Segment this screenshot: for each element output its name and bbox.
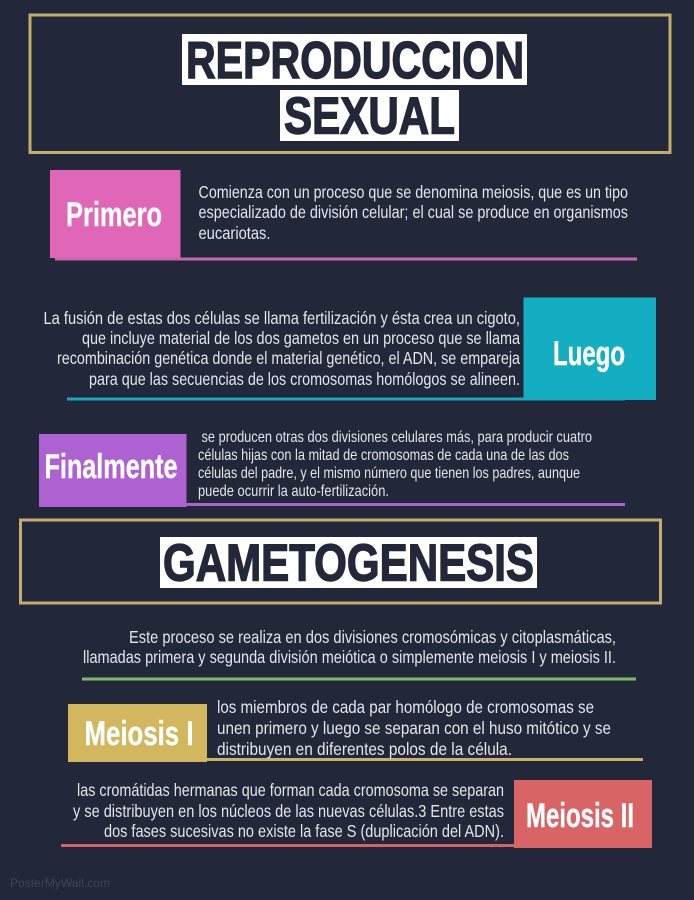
title highlight line 2: SEXUAL — [284, 88, 455, 146]
panel: Finalmente — [39, 429, 625, 507]
label: Finalmente — [39, 434, 186, 507]
title highlight line 1: REPRODUCCION — [186, 32, 524, 90]
text block: Meiosis II: las cromátidas hermanas que forman cada cromosoma se separan — [77, 780, 504, 800]
label: Meiosis II — [514, 780, 652, 848]
text block: Luego: para que las secuencias de los cromosomas homólogos se alineen. — [89, 369, 520, 389]
text block: Meiosis II — [73, 780, 504, 841]
label: Luego — [524, 298, 656, 400]
text block: Primero — [198, 182, 628, 243]
label: Luego: Luego — [553, 335, 625, 373]
label: Finalmente: Finalmente — [44, 448, 178, 486]
label: Primero: Primero — [66, 196, 162, 234]
text block: Meiosis I: distribuyen en diferentes polos de la célula. — [217, 739, 512, 759]
text block: Meiosis I: unen primero y luego se separan con el huso mitótico y se — [217, 718, 611, 738]
panel: main title — [30, 15, 670, 152]
text block: Gametogenesis intro — [82, 627, 636, 680]
label: Primero — [50, 170, 180, 258]
panel: Luego — [44, 298, 656, 400]
text block: Finalmente — [198, 429, 592, 500]
text block: Luego: que incluye material de los dos gametos en un proceso que se llama — [82, 328, 520, 348]
watermark: PosterMyWall.com — [10, 876, 110, 890]
text block: Meiosis II: y se distribuyen en los núcleos de las nuevas células.3 Entre estas — [73, 801, 504, 821]
panel: Primero — [50, 170, 637, 260]
text block: Finalmente: células del padre, y el mismo número que tienen los padres, aunque — [198, 465, 580, 482]
text block: Meiosis II: dos fases sucesivas no existe la fase S (duplicación del ADN). — [104, 821, 504, 841]
label: Meiosis I — [68, 704, 207, 762]
text block: Meiosis I: los miembros de cada par homólogo de cromosomas se — [217, 697, 594, 717]
title highlight: Gametogenesis: GAMETOGENESIS — [163, 534, 534, 592]
text block: Gametogenesis intro: Este proceso se realiza en dos divisiones cromosómicas y citoplasmáticas, — [129, 627, 616, 647]
text block: Luego: La fusión de estas dos células se llama fertilización y ésta crea un cigoto, — [44, 308, 520, 328]
text block: Luego — [44, 308, 520, 389]
label: Meiosis II: Meiosis II — [526, 797, 634, 835]
text block: Luego: recombinación genética donde el material genético, el ADN, se empareja — [57, 348, 520, 368]
text block: Primero: eucariotas. — [198, 223, 270, 243]
panel: Gametogenesis title — [20, 520, 660, 603]
panel: Meiosis I — [68, 697, 643, 762]
text block: Meiosis I — [217, 697, 611, 759]
text block: Finalmente: células hijas con la mitad de cromosomas de cada una de las dos — [198, 447, 569, 464]
text block: Finalmente: puede ocurrir la auto-fertilización. — [198, 483, 389, 500]
label: Meiosis I: Meiosis I — [84, 715, 194, 753]
panel: Meiosis II — [61, 780, 652, 848]
text block: Finalmente: se producen otras dos divisiones celulares más, para producir cuatro — [202, 429, 592, 446]
